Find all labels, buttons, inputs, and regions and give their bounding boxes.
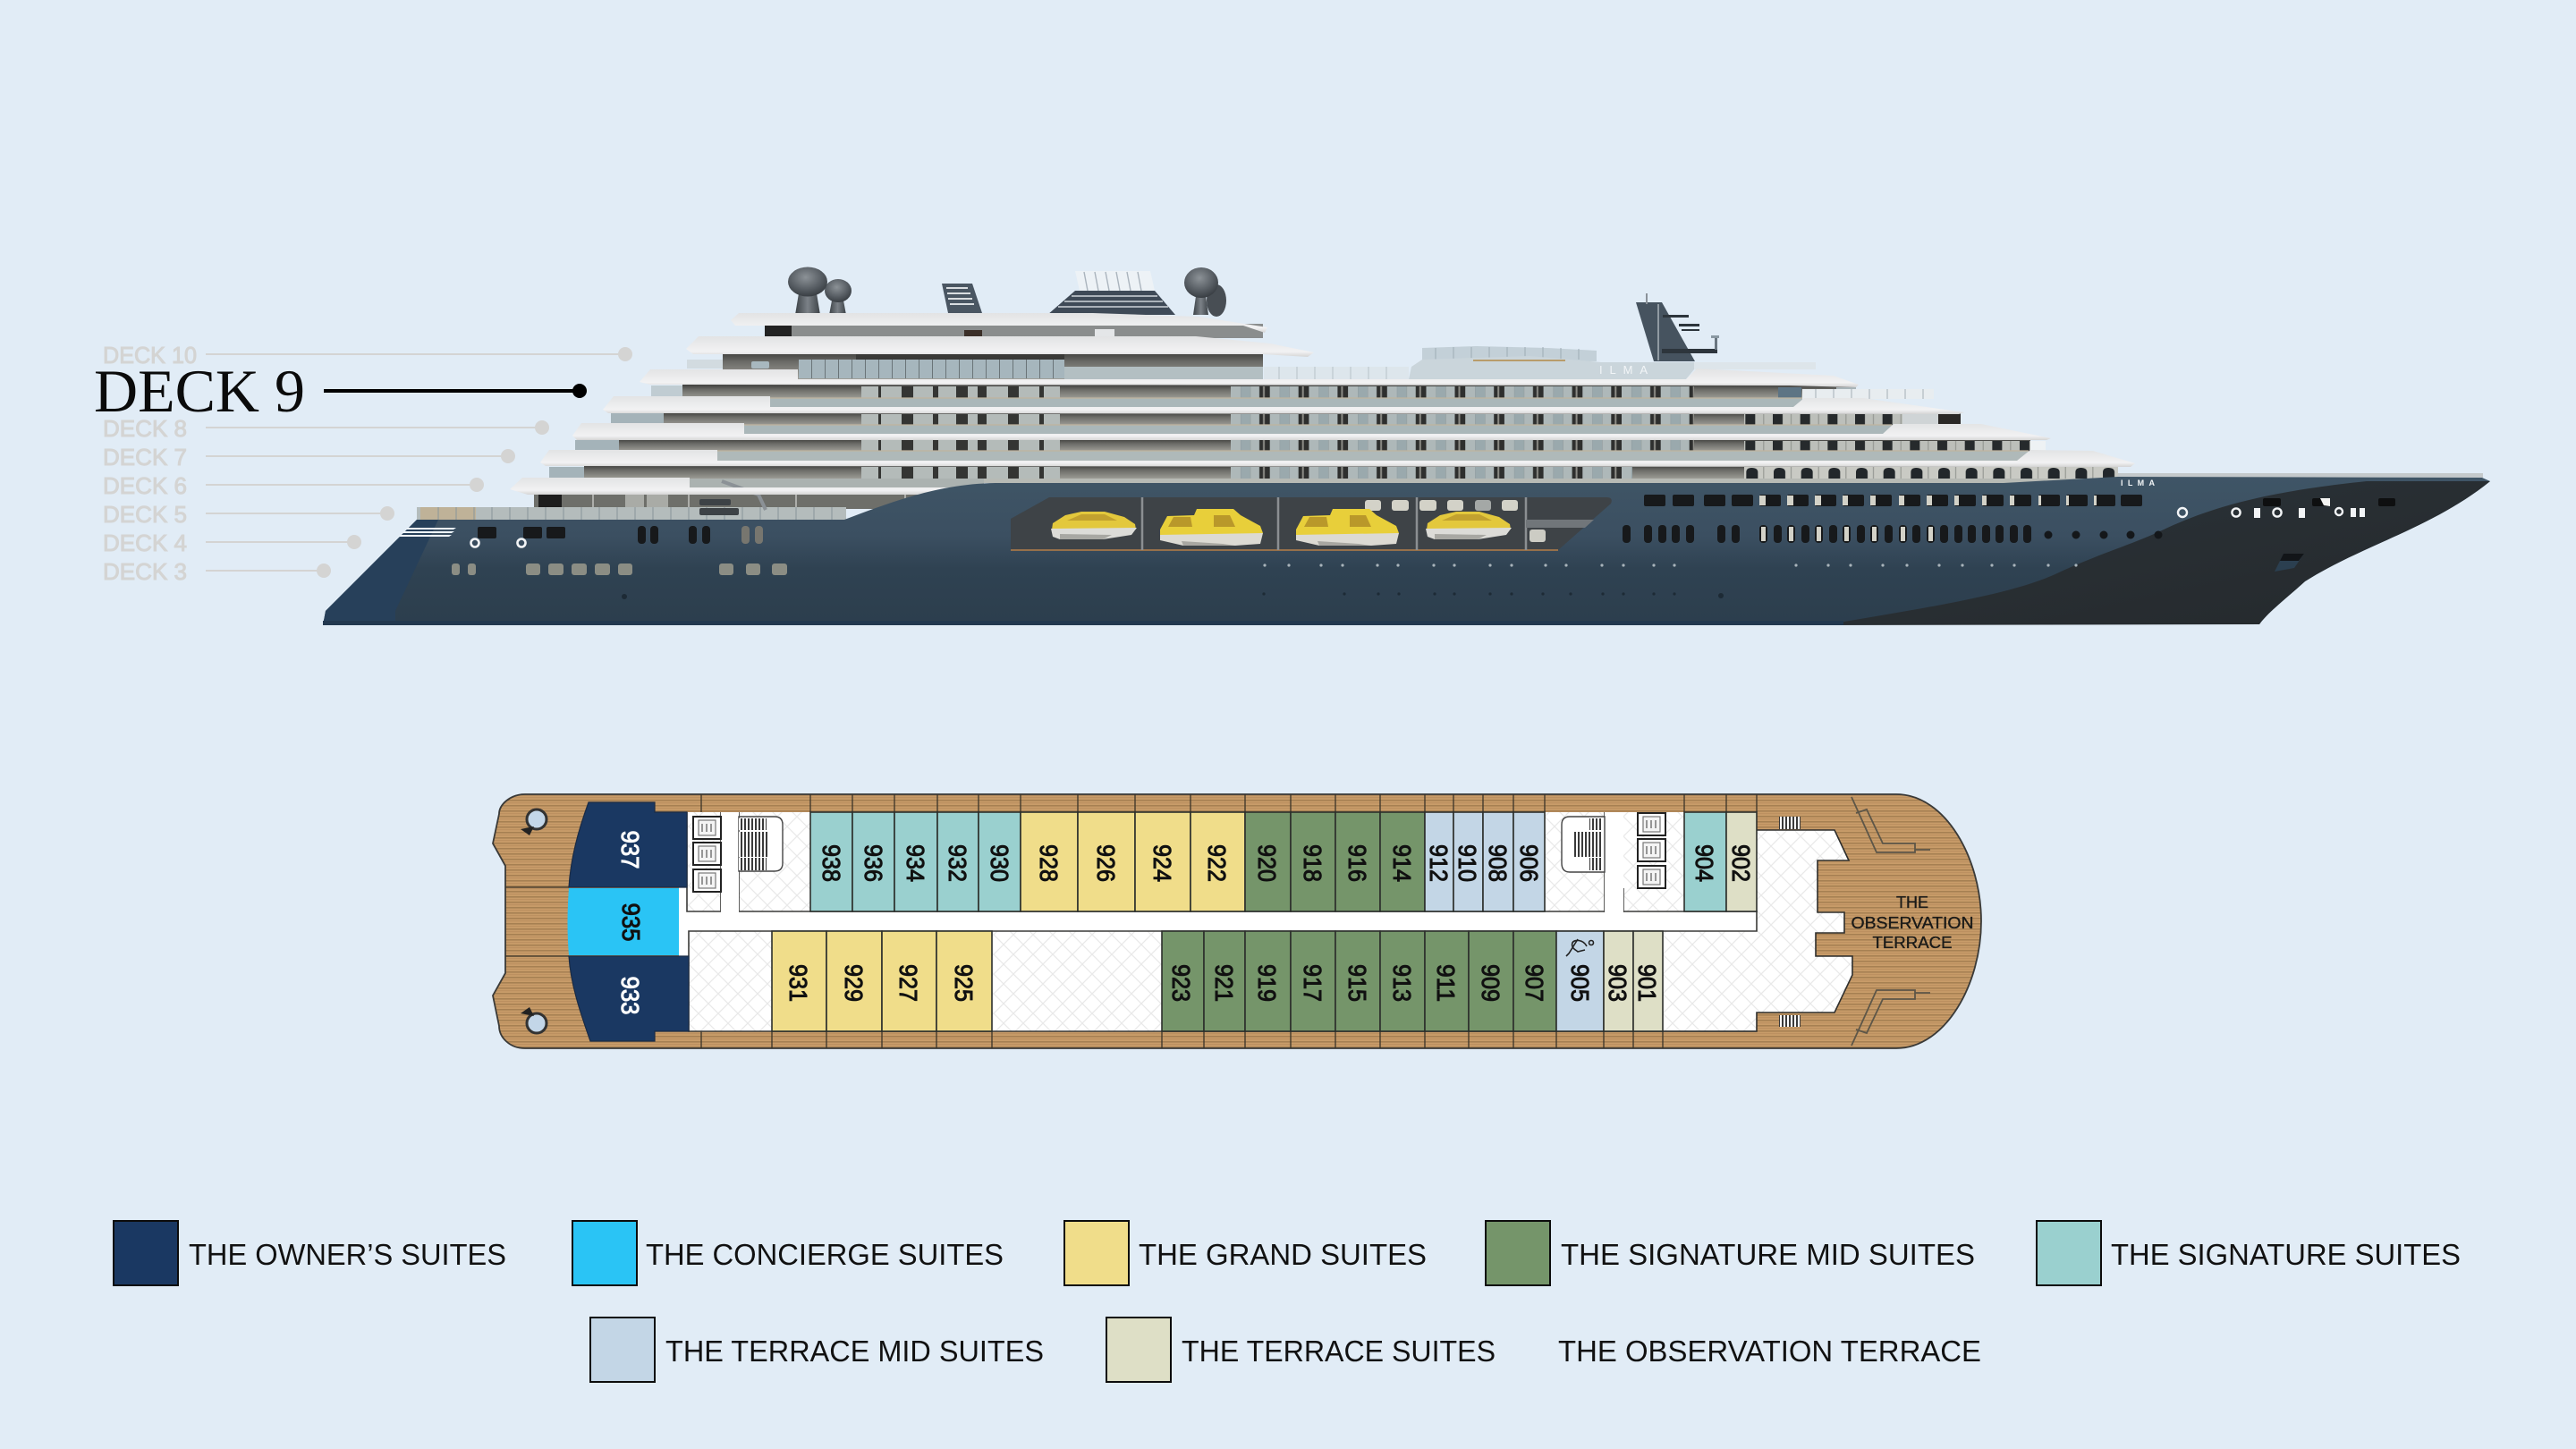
- legend item: grand suites: [1064, 1221, 1427, 1285]
- suite numbers owner's and concierge: 933: [616, 977, 644, 1014]
- suite numbers bottom row: 909: [1477, 964, 1504, 1002]
- legend item: signature mid suites: THE SIGNATURE MID SUITES: [1561, 1238, 1975, 1271]
- sun deck glass structure: [1264, 346, 1816, 379]
- icon: lifeboat 4: [1426, 512, 1512, 539]
- label: deck 4: [103, 530, 361, 556]
- terrace davits: [1852, 797, 1930, 1046]
- ship side elevation: [323, 267, 2490, 625]
- suite numbers bottom row: 923: [1167, 964, 1195, 1002]
- stairs forward: [1562, 817, 1605, 872]
- suite numbers top row: 922: [1203, 844, 1231, 882]
- balcony glass rails: [417, 389, 2118, 520]
- label: deck 9 (active): DECK 9: [94, 357, 305, 425]
- legend item: signature mid suites: [1486, 1221, 1975, 1285]
- deck plank dividers: [505, 794, 1757, 1048]
- elevators aft: [693, 817, 721, 892]
- suite numbers bottom row: 903: [1604, 964, 1631, 1002]
- suite numbers top row: 920: [1253, 844, 1281, 882]
- icon: forward radar domes: [1184, 267, 1226, 317]
- terrace label: OBSERVATION: [1852, 914, 1973, 932]
- terrace label: THE: [1896, 894, 1928, 911]
- foredeck rail: [2118, 473, 2483, 478]
- hull dark dots: [622, 592, 1724, 599]
- legend item: terrace suites: [1106, 1318, 1496, 1382]
- hull windows row 2: [1623, 525, 2031, 543]
- suite numbers bottom row: 911: [1432, 964, 1460, 1002]
- bow markings: [2178, 498, 2395, 572]
- legend item: concierge suites: THE CONCIERGE SUITES: [646, 1238, 1004, 1271]
- plan outline: teak deck: [493, 794, 1981, 1048]
- icon: mast: [1636, 293, 1719, 361]
- suite numbers bottom row: 907: [1521, 964, 1548, 1002]
- icon: accessible suite: [1566, 939, 1594, 956]
- suite numbers top row: [818, 844, 1755, 882]
- suite numbers top row: 918: [1299, 844, 1326, 882]
- suite numbers owner's and concierge: 937: [616, 830, 644, 869]
- suite numbers top row: 916: [1343, 844, 1371, 882]
- lifeboat bay: [1011, 497, 1612, 551]
- suite numbers bottom row: 929: [840, 964, 868, 1002]
- suite numbers owner's and concierge: 935: [617, 903, 645, 941]
- label: deck 5: DECK 5: [103, 501, 187, 528]
- suite numbers top row: 910: [1453, 844, 1481, 882]
- suite numbers top row: 902: [1727, 844, 1755, 882]
- suite numbers top row: 928: [1035, 844, 1063, 882]
- suite numbers bottom row: [784, 964, 1661, 1002]
- hull: [323, 477, 2490, 625]
- legend item: owner's suites: [114, 1221, 506, 1285]
- suite numbers bottom row: 927: [894, 964, 922, 1002]
- legend item: terrace mid suites: THE TERRACE MID SUITES: [665, 1335, 1044, 1368]
- suite numbers top row: 912: [1425, 844, 1453, 882]
- icon: lifeboat 1: [1051, 512, 1137, 539]
- owner's and concierge suites: [567, 802, 689, 1041]
- hull windows row 1 highlights: [1759, 496, 2097, 505]
- suite numbers top row: 938: [818, 844, 845, 882]
- suite numbers bottom row: 919: [1253, 964, 1281, 1002]
- bay windows: [1365, 500, 1518, 511]
- suite numbers top row: 924: [1148, 844, 1176, 882]
- legend item: grand suites: THE GRAND SUITES: [1139, 1238, 1427, 1271]
- suite numbers bottom row: 917: [1299, 964, 1326, 1002]
- terrace access stairs: [1779, 817, 1801, 1027]
- suite numbers bottom row: 901: [1633, 964, 1661, 1002]
- hull: stern shade: [323, 520, 438, 625]
- stern stripes logo: [398, 528, 456, 537]
- icon: aft vent block: [942, 284, 982, 313]
- hull: bow shadow: [1823, 481, 2490, 625]
- legend item: terrace mid suites: [590, 1318, 1044, 1382]
- interior white area: [679, 812, 1852, 1031]
- stern life rings: [470, 538, 526, 547]
- suite numbers owner's and concierge: [616, 830, 645, 1014]
- hull light dots: [1263, 564, 2078, 567]
- deck plan: [493, 794, 1981, 1048]
- label: deck 7: DECK 7: [103, 444, 187, 470]
- suite numbers top row: 930: [986, 844, 1013, 882]
- label: deck 5: [103, 501, 394, 528]
- stern bollards: [521, 809, 547, 1033]
- hull: waterline band: [323, 621, 1843, 625]
- portholes: [2045, 531, 2163, 538]
- label: deck 6: DECK 6: [103, 472, 187, 499]
- legend item: concierge suites: [572, 1221, 1004, 1285]
- terrace label: TERRACE: [1873, 934, 1952, 952]
- suite numbers top row: 908: [1484, 844, 1512, 882]
- icon: aft radar domes: [788, 267, 852, 315]
- label: deck 7: [103, 444, 515, 470]
- elevators forward: [1638, 813, 1665, 888]
- ship name: upper: ILMA: [1599, 363, 1648, 377]
- label: deck 9 (active): [94, 357, 587, 425]
- suite numbers top row: 936: [860, 844, 887, 882]
- suite numbers top row: 906: [1515, 844, 1543, 882]
- legend item: observation terrace: THE OBSERVATION TERRACE: [1558, 1335, 1981, 1368]
- suite numbers top row: 926: [1092, 844, 1120, 882]
- suite numbers top row: 932: [944, 844, 971, 882]
- deck selector labels: [94, 342, 632, 585]
- ship name: bow: ILMA: [2121, 479, 2156, 487]
- stern windows row 3: [452, 564, 787, 575]
- label: deck 10: DECK 10: [103, 342, 197, 369]
- suite numbers top row: 904: [1690, 844, 1718, 882]
- suite numbers bottom row: 921: [1210, 964, 1238, 1002]
- label: deck 4: DECK 4: [103, 530, 187, 556]
- superstructure window bands: [534, 324, 2118, 509]
- suite numbers bottom row: 905: [1566, 964, 1594, 1002]
- suite numbers bottom row: 931: [784, 964, 812, 1002]
- icon: lifeboat 3: [1296, 509, 1399, 546]
- label: deck 3: [103, 558, 331, 585]
- label: deck 8: [103, 415, 549, 442]
- suites top row: [810, 812, 1757, 911]
- label: deck 6: [103, 472, 484, 499]
- hull windows row 1: [478, 495, 2142, 544]
- suite numbers bottom row: 925: [950, 964, 978, 1002]
- icon: lifeboat 2: [1160, 509, 1263, 546]
- suite numbers bottom row: 913: [1388, 964, 1416, 1002]
- stairs aft: [739, 817, 783, 871]
- label: deck 8: DECK 8: [103, 415, 187, 442]
- legend item: signature suites: [2037, 1221, 2461, 1285]
- legend item: signature suites: THE SIGNATURE SUITES: [2111, 1238, 2461, 1271]
- suites bottom row: [772, 931, 1663, 1031]
- legend item: owner's suites: THE OWNER’S SUITES: [189, 1238, 506, 1271]
- hull windows row 2 highlights: [1761, 527, 1933, 541]
- suite numbers bottom row: 915: [1343, 964, 1371, 1002]
- funnel: [1047, 271, 1175, 315]
- label: deck 3: DECK 3: [103, 558, 187, 585]
- suite numbers top row: 914: [1388, 844, 1416, 882]
- suite numbers top row: 934: [902, 844, 929, 882]
- terrace label: [1852, 894, 1973, 952]
- lower deck lifesaving canisters: [699, 481, 766, 515]
- label: deck 10: [103, 342, 632, 369]
- legend: [114, 1221, 2461, 1382]
- legend item: terrace suites: THE TERRACE SUITES: [1182, 1335, 1496, 1368]
- white deck overhangs: [510, 313, 2135, 495]
